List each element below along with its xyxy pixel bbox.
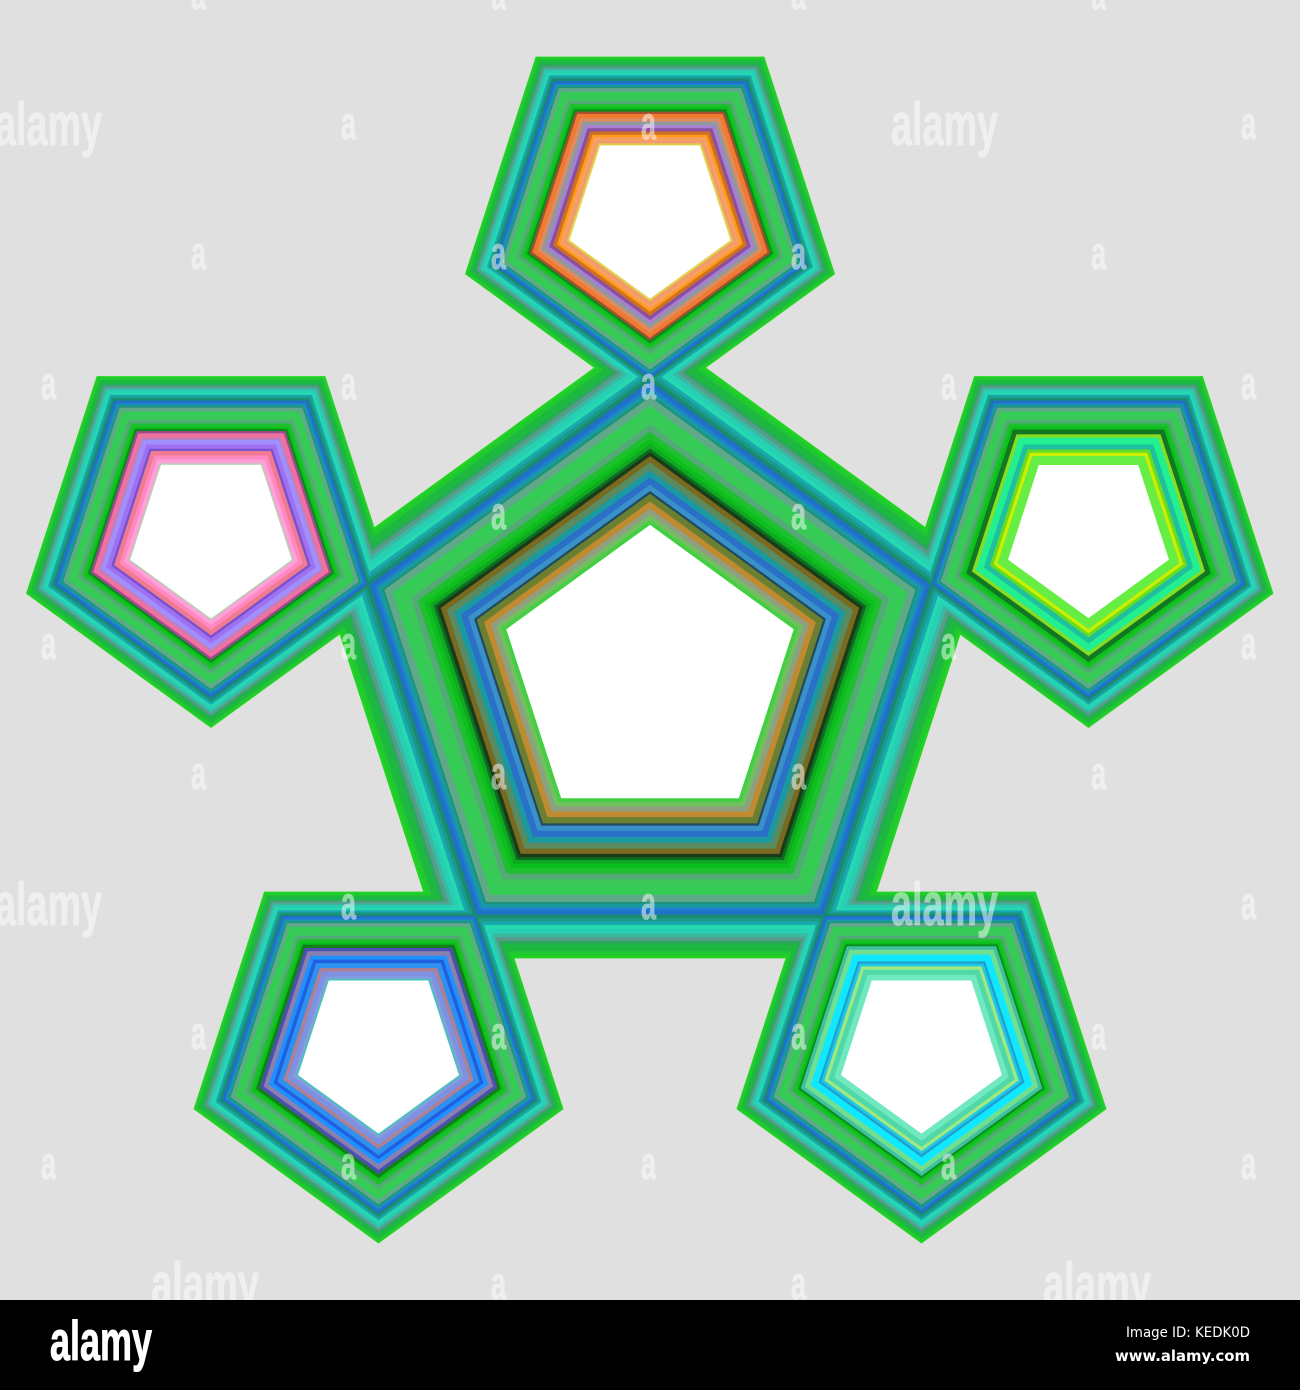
watermark pattern: a [1241,617,1256,669]
pentagon: bottom-left blue [222,916,535,1213]
watermark pattern: a [341,877,356,929]
watermark pattern: a [341,1137,356,1189]
watermark pattern: a [41,1137,56,1189]
watermark pattern: a [641,617,656,669]
watermark pattern: a [491,487,506,539]
watermark pattern: a [191,747,206,799]
watermark pattern: a [641,357,656,409]
watermark pattern: a [341,97,356,149]
watermark pattern: a [1241,97,1256,149]
watermark pattern: alamy [0,871,102,938]
pentagon: right lime [932,401,1245,698]
watermark pattern: a [41,357,56,409]
watermark pattern: a [191,227,206,279]
watermark pattern: a [1091,487,1106,539]
pentagon: left pink [55,401,367,698]
watermark pattern: alamy [891,871,998,938]
watermark pattern: a [1241,1137,1256,1189]
watermark pattern: a [791,227,806,279]
watermark pattern: a [941,357,956,409]
watermark pattern: a [1091,747,1106,799]
watermark pattern: a [791,1257,806,1309]
watermark pattern: a [491,747,506,799]
footer logo: alamy [50,1309,152,1372]
footer bar [0,1300,1300,1390]
watermark pattern: a [1241,357,1256,409]
watermark pattern: a [941,617,956,669]
watermark pattern: a [791,487,806,539]
watermark pattern: alamy [1043,1251,1151,1318]
watermark pattern: a [641,97,656,149]
watermark pattern: a [1241,877,1256,929]
watermark pattern: alamy [151,1251,259,1318]
watermark pattern: a [641,1137,656,1189]
pentagon: centre [370,381,930,915]
watermark pattern: a [491,227,506,279]
watermark pattern: a [191,487,206,539]
watermark pattern: a [791,1007,806,1059]
watermark pattern: a [791,747,806,799]
watermark pattern: a [341,617,356,669]
watermark pattern: a [1091,227,1106,279]
watermark pattern: a [1091,1007,1106,1059]
pentagon: top orange [494,81,806,378]
watermark pattern: a [641,877,656,929]
watermark pattern: alamy [891,91,998,158]
watermark pattern: a [41,617,56,669]
watermark pattern: a [341,357,356,409]
watermark pattern: a [191,1007,206,1059]
watermark pattern: a [941,1137,956,1189]
image id: Image ID: KEDK0D [1126,1325,1250,1341]
watermark pattern: a [491,1007,506,1059]
website: www.alamy.com [1115,1347,1250,1365]
watermark pattern: a [491,1257,506,1309]
watermark pattern: alamy [0,91,102,158]
pentagon: bottom-right cyan [765,916,1078,1213]
